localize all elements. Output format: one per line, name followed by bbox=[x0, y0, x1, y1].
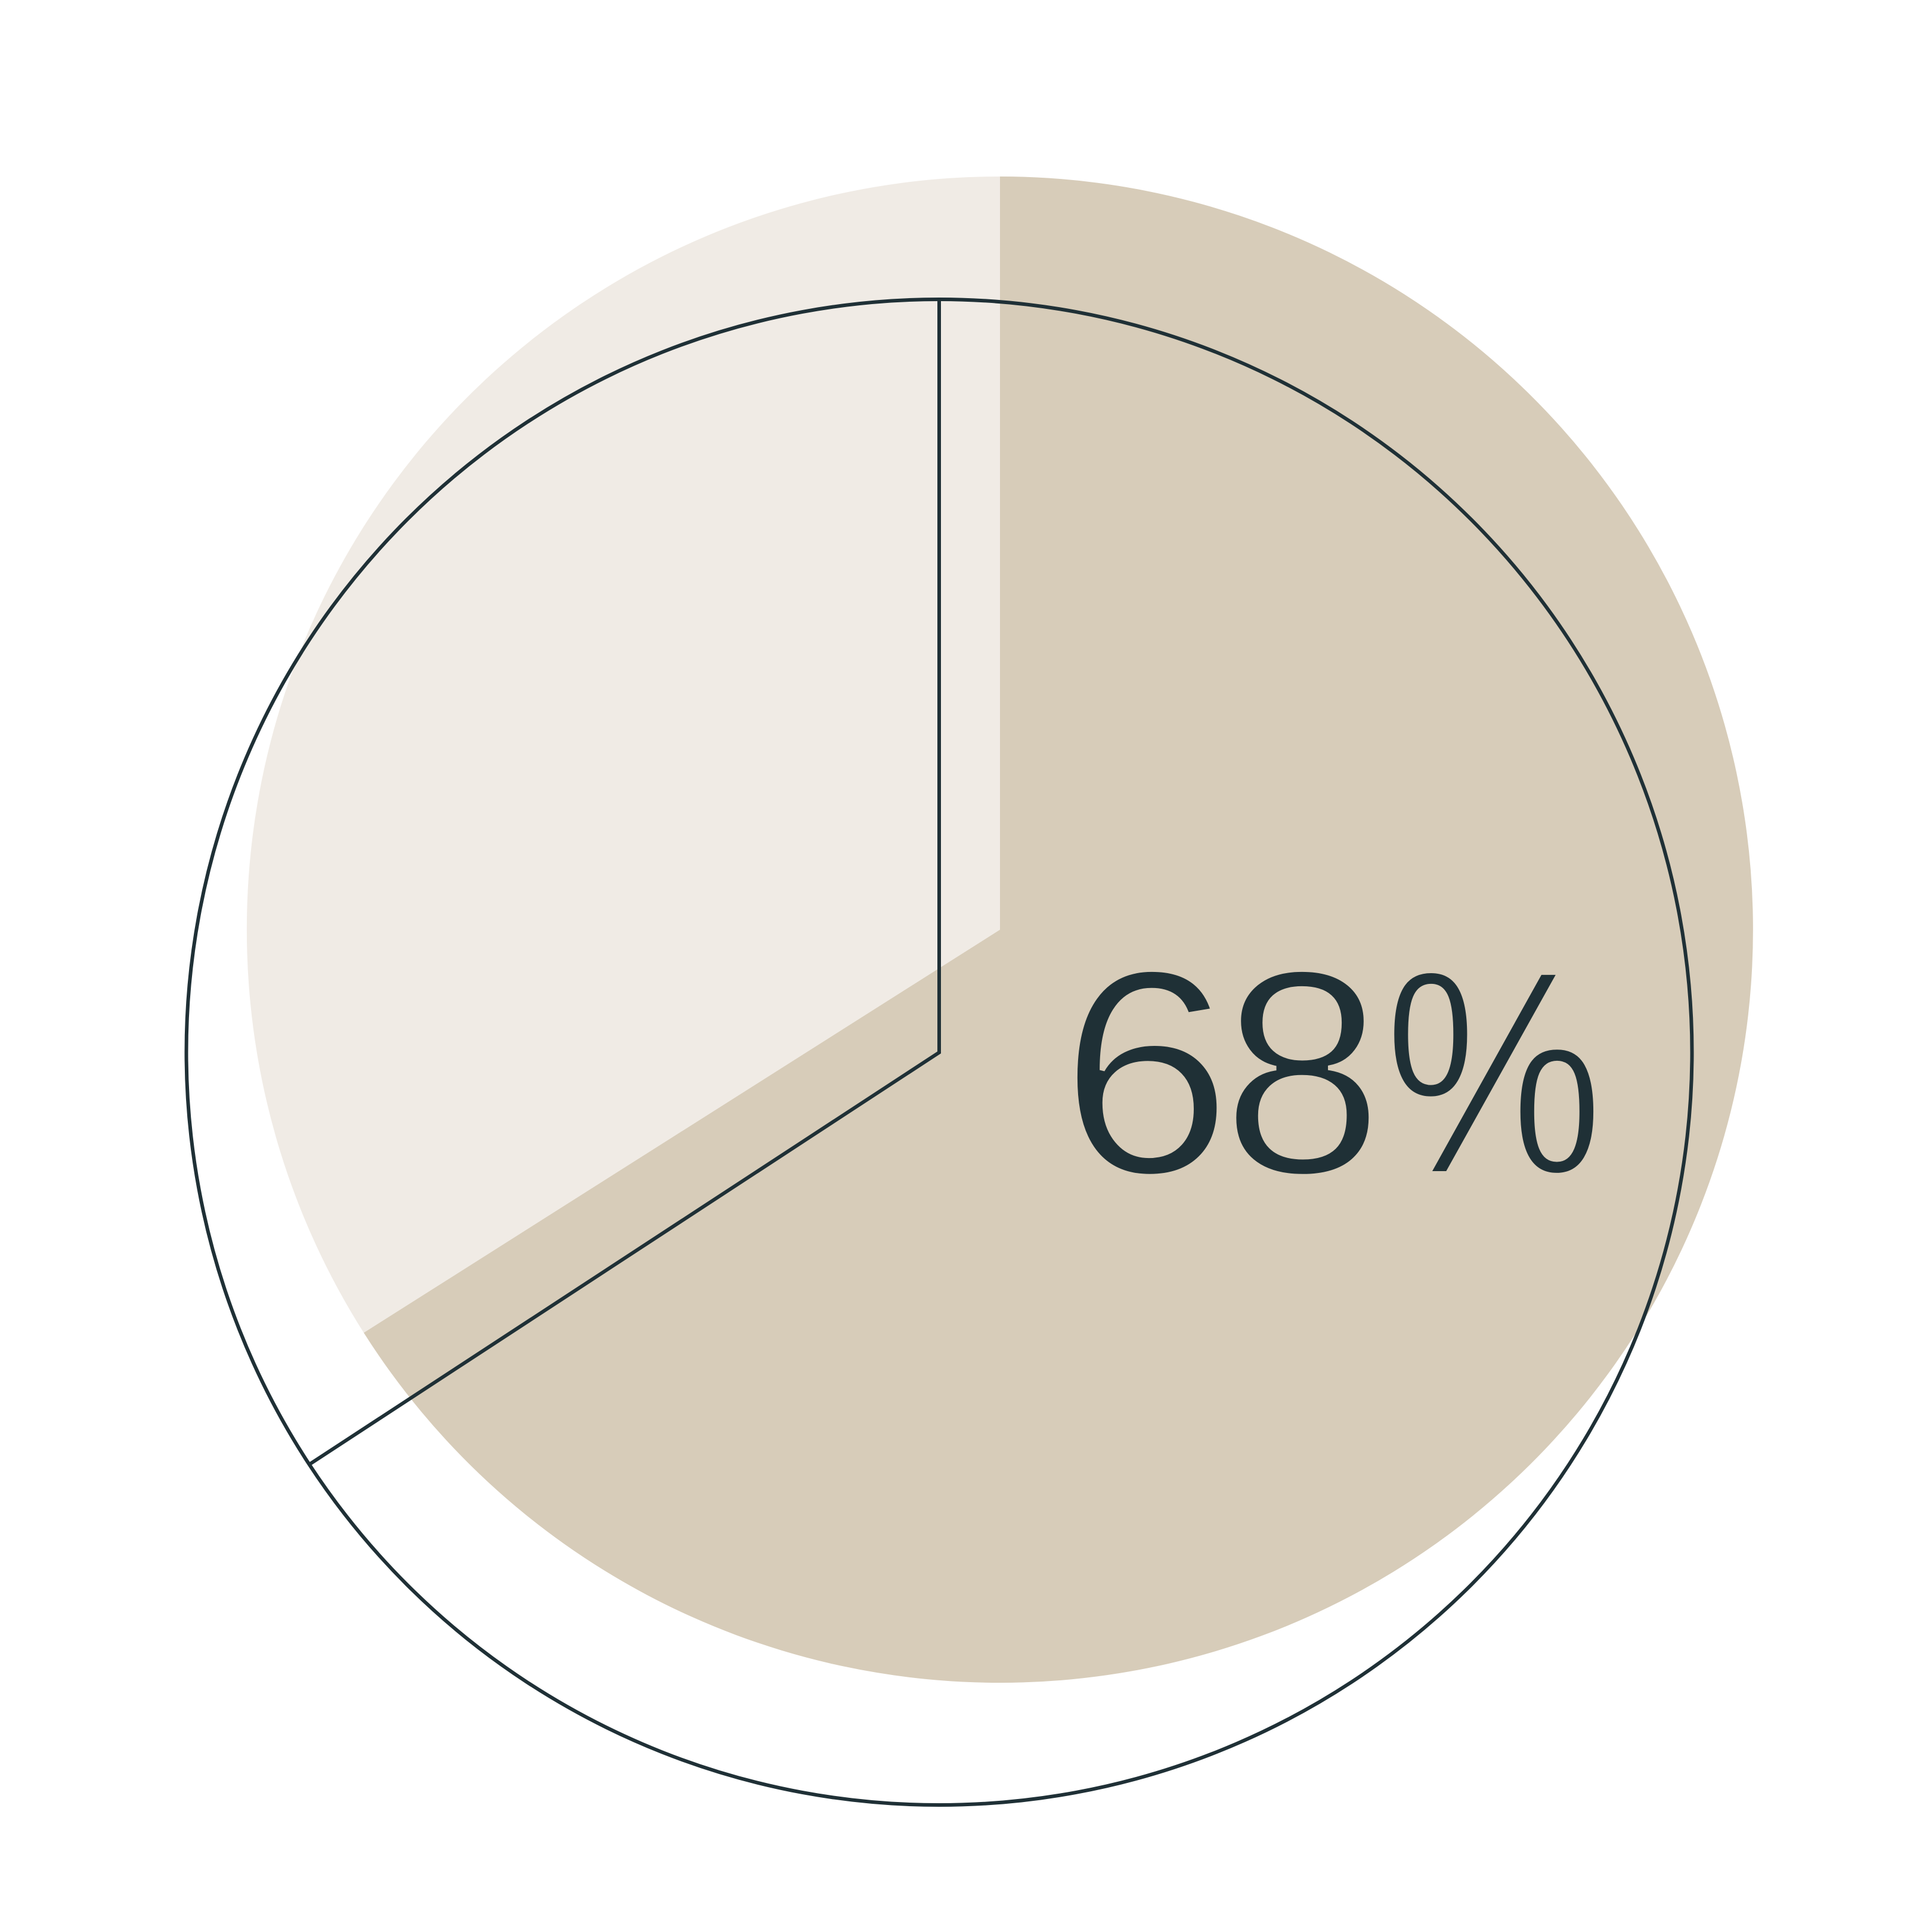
outline slice radii bbox=[310, 299, 939, 1464]
percentage value: 6 bbox=[1059, 909, 1233, 1236]
pie slice: remaining share bbox=[247, 177, 1000, 1333]
filled pie chart bbox=[247, 177, 1753, 1683]
outline circle bbox=[186, 299, 1692, 1805]
percentage value bbox=[1059, 909, 1604, 1236]
percentage value: % bbox=[1383, 909, 1604, 1236]
offset outline pie chart bbox=[186, 299, 1692, 1805]
pie slice: 68% share bbox=[364, 177, 1753, 1683]
percentage value: 8 bbox=[1221, 909, 1384, 1236]
